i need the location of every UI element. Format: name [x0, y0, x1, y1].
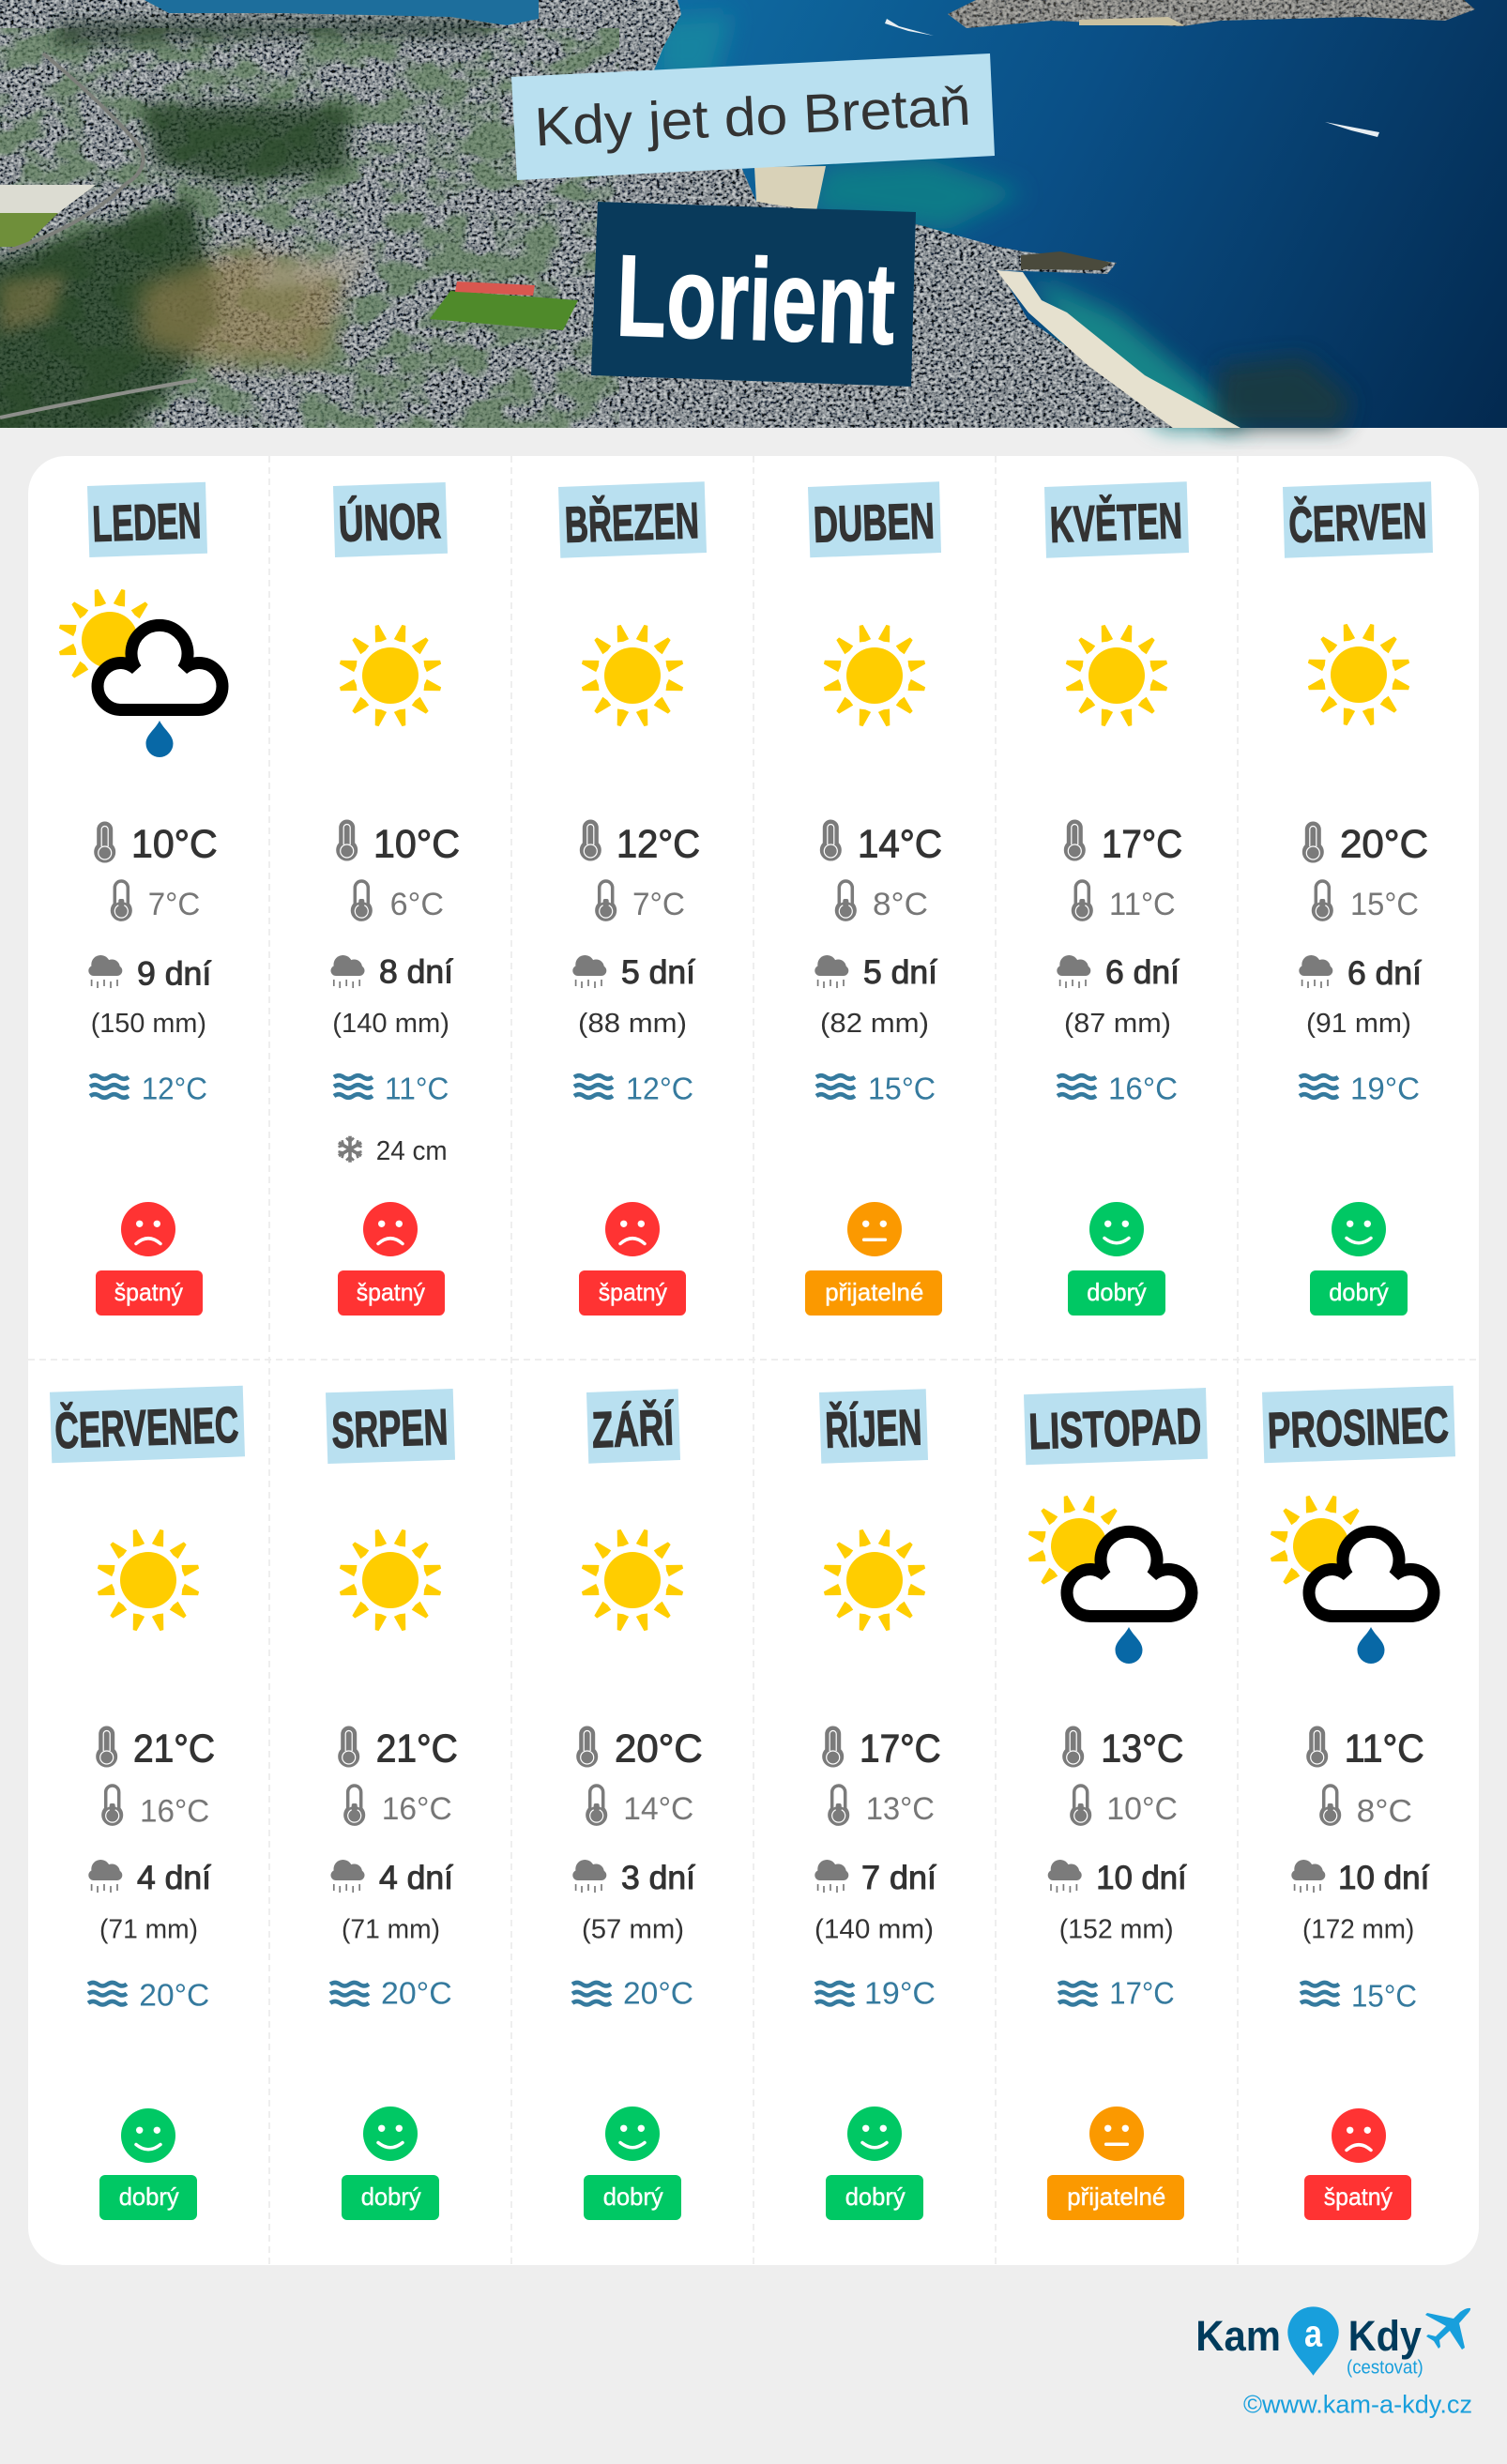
precipitation: (88 mm): [578, 1009, 687, 1039]
rainy days: [814, 1860, 936, 1896]
icon: sun: [339, 624, 442, 727]
icon: map pin: [1287, 2306, 1339, 2376]
rainy days: 10 dní: [1096, 1860, 1187, 1896]
icon: sun with cloud and rain: [58, 588, 222, 757]
rating badge: špatný: [1324, 2183, 1393, 2211]
heading: KVĚTEN: KVĚTEN: [1049, 492, 1183, 554]
heading: KVĚTEN: [1044, 481, 1189, 558]
rating face: [363, 2107, 418, 2161]
rainy days: 7 dní: [861, 1860, 936, 1896]
rating badge: dobrý: [603, 2183, 663, 2211]
min temperature: [112, 881, 200, 922]
max temperature: 20°C: [1340, 822, 1428, 865]
rating face: [363, 1202, 418, 1256]
photo: aerial view of Lorient coast: [0, 0, 1507, 450]
rating badge: [338, 1270, 445, 1316]
precipitation: (71 mm): [99, 1914, 198, 1944]
precipitation: (87 mm): [1064, 1009, 1171, 1039]
sea temperature: [574, 1072, 693, 1106]
sea temperature: 19°C: [1350, 1072, 1420, 1106]
rainy days: 5 dní: [621, 954, 695, 991]
rating badge: přijatelné: [825, 1278, 923, 1306]
rainy days: [1291, 1860, 1430, 1896]
max temperature: 10°C: [131, 822, 218, 865]
min temperature: [587, 1786, 693, 1827]
heading: ŘÍJEN: ŘÍJEN: [824, 1398, 922, 1459]
sea temperature: [572, 1976, 693, 2011]
month: Srpen: [326, 1389, 458, 2220]
max temperature: 13°C: [1101, 1726, 1183, 1771]
rating face: [605, 2107, 660, 2161]
website credit: ©www.kam-a-kdy.cz: [1243, 2391, 1472, 2419]
min temperature: [836, 881, 928, 922]
rating badge: dobrý: [1087, 1278, 1147, 1306]
rainy days: [572, 954, 695, 991]
sea temperature: 16°C: [1108, 1072, 1178, 1106]
precipitation: (140 mm): [332, 1009, 449, 1039]
max temperature: [1064, 820, 1182, 865]
icon: sun: [339, 1529, 442, 1632]
rainy days: 4 dní: [379, 1860, 453, 1896]
heading: ČERVEN: [1283, 481, 1433, 558]
sea temperature: 15°C: [868, 1072, 936, 1106]
icon: sun with cloud and rain: [1270, 1495, 1434, 1664]
rating badge: [1304, 2175, 1411, 2220]
rainy days: [814, 954, 937, 991]
min temperature: 7°C: [148, 887, 200, 922]
logo: Kam a Kdy: [1195, 2306, 1470, 2378]
max temperature: [95, 822, 218, 865]
month: Duben: [805, 481, 942, 1316]
min temperature: 11°C: [1109, 887, 1176, 922]
min temperature: 7°C: [632, 887, 685, 922]
logo: Kam a Kdy: Kam: [1195, 2312, 1281, 2360]
max temperature: 12°C: [616, 822, 700, 865]
heading: ÚNOR: [333, 482, 448, 557]
sea temperature: [815, 1976, 936, 2011]
rating face: [121, 2108, 175, 2163]
rating badge: [96, 1270, 203, 1316]
max temperature: 10°C: [373, 822, 460, 865]
snow depth: [338, 1136, 448, 1166]
precipitation: (71 mm): [342, 1914, 440, 1944]
rating face: [847, 1202, 902, 1256]
rating badge: dobrý: [361, 2183, 421, 2211]
precipitation: (57 mm): [582, 1914, 684, 1944]
max temperature: [339, 1726, 458, 1771]
month: Říjen: [814, 1389, 941, 2220]
rating badge: [1310, 1270, 1408, 1316]
max temperature: [823, 1726, 941, 1771]
rainy days: 5 dní: [863, 954, 937, 991]
max temperature: [820, 820, 942, 865]
heading: DUBEN: DUBEN: [813, 493, 936, 554]
rating badge: [826, 2175, 923, 2220]
sea temperature: [90, 1072, 207, 1106]
icon: sun: [581, 1529, 684, 1632]
min temperature: 14°C: [623, 1791, 693, 1827]
max temperature: [580, 820, 700, 865]
precipitation: (172 mm): [1302, 1914, 1414, 1944]
heading: BŘEZEN: [558, 481, 707, 558]
rating face: [605, 1202, 660, 1256]
sea temperature: 20°C: [139, 1978, 209, 2013]
rainy days: 10 dní: [1338, 1860, 1430, 1896]
rating badge: dobrý: [119, 2183, 179, 2211]
rainy days: 6 dní: [1105, 954, 1180, 991]
sea temperature: 12°C: [626, 1072, 693, 1106]
rainy days: [330, 1860, 453, 1896]
sea temperature: [1301, 1978, 1417, 2013]
rating face: [847, 2107, 902, 2161]
rainy days: 8 dní: [379, 954, 453, 991]
min temperature: [103, 1786, 209, 1830]
month: Prosinec: [1262, 1386, 1455, 2220]
rating badge: přijatelné: [1067, 2183, 1165, 2211]
heading: ČERVENEC: ČERVENEC: [53, 1396, 239, 1459]
heading: ZÁŘÍ: ZÁŘÍ: [591, 1398, 676, 1459]
rating face: [121, 1202, 175, 1256]
month: Květen: [1044, 481, 1189, 1316]
rainy days: 3 dní: [621, 1860, 695, 1896]
min temperature: [1073, 881, 1176, 922]
icon: sun: [1065, 624, 1168, 727]
max temperature: 14°C: [858, 822, 942, 865]
logo: Kam a Kdy: a: [1304, 2314, 1323, 2355]
max temperature: 11°C: [1345, 1726, 1424, 1771]
precipitation: (91 mm): [1306, 1009, 1411, 1039]
heading: BŘEZEN: BŘEZEN: [564, 492, 700, 554]
icon: airplane: [1425, 2308, 1470, 2350]
sea temperature: 12°C: [142, 1072, 207, 1106]
rainy days: [1299, 955, 1422, 992]
rating face: [1089, 1202, 1144, 1256]
min temperature: [597, 881, 685, 922]
month: Červenec: [50, 1386, 245, 2220]
rainy days: 6 dní: [1347, 955, 1422, 992]
max temperature: [1307, 1726, 1424, 1771]
rainy days: [572, 1860, 695, 1896]
sea temperature: [330, 1976, 452, 2011]
rating badge: [584, 2175, 681, 2220]
rainy days: [330, 954, 453, 991]
rainy days: 4 dní: [137, 1860, 211, 1896]
max temperature: 21°C: [376, 1726, 458, 1771]
title label: Kdy jet do Bretaň: Kdy jet do Bretaň: [533, 76, 972, 158]
rainy days: [1048, 1860, 1187, 1896]
rating badge: [99, 2175, 197, 2220]
rating badge: špatný: [114, 1278, 183, 1306]
heading: ČERVENEC: [50, 1386, 245, 1463]
heading: PROSINEC: [1262, 1386, 1455, 1463]
min temperature: 8°C: [1357, 1794, 1412, 1830]
heading: ÚNOR: ÚNOR: [338, 493, 442, 553]
sea temperature: [1058, 1976, 1175, 2011]
title label: Kdy jet do Bretaň: [511, 53, 995, 180]
max temperature: [337, 820, 460, 865]
rating face: [1089, 2107, 1144, 2161]
min temperature: [1313, 881, 1419, 922]
month: Únor: [330, 482, 460, 1316]
min temperature: [830, 1786, 935, 1827]
heading: LEDEN: LEDEN: [91, 493, 202, 553]
precipitation: (82 mm): [820, 1009, 929, 1039]
min temperature: 13°C: [866, 1791, 935, 1827]
month: Listopad: [1024, 1388, 1208, 2220]
sea temperature: 20°C: [623, 1976, 693, 2011]
heading: ZÁŘÍ: [586, 1389, 680, 1464]
icon: sun: [823, 624, 926, 727]
rating badge: [579, 1270, 686, 1316]
max temperature: 17°C: [1102, 822, 1182, 865]
min temperature: [1321, 1786, 1412, 1830]
rating badge: [1068, 1270, 1165, 1316]
rainy days: [88, 955, 212, 992]
month: Leden: [58, 482, 222, 1316]
max temperature: [97, 1726, 215, 1771]
heading: LISTOPAD: LISTOPAD: [1028, 1398, 1202, 1460]
rainy days: [1057, 954, 1180, 991]
logo: Kam a Kdy: (cestovat): [1347, 2357, 1423, 2378]
max temperature: 21°C: [133, 1726, 215, 1771]
min temperature: 15°C: [1350, 887, 1419, 922]
rating face: [1332, 1202, 1386, 1256]
sea temperature: [334, 1072, 449, 1106]
title label: Lorient: Lorient: [615, 231, 897, 370]
heading: LEDEN: [87, 482, 207, 557]
rainy days: 9 dní: [137, 955, 212, 992]
max temperature: 20°C: [615, 1726, 703, 1771]
min temperature: 10°C: [1106, 1791, 1178, 1827]
rainy days: [88, 1860, 211, 1896]
title label: Lorient: [591, 202, 916, 387]
icon: sun: [1307, 623, 1410, 726]
icon: sun: [823, 1529, 926, 1632]
heading: DUBEN: [808, 481, 941, 557]
max temperature: [577, 1726, 703, 1771]
min temperature: [345, 1786, 452, 1827]
min temperature: [352, 881, 444, 922]
rating badge: špatný: [357, 1278, 425, 1306]
rating face: [1332, 2108, 1386, 2163]
precipitation: (140 mm): [814, 1914, 934, 1944]
logo: Kam a Kdy: Kdy: [1348, 2312, 1422, 2360]
rating badge: [805, 1270, 942, 1316]
month: Září: [572, 1389, 703, 2220]
icon: sun: [97, 1529, 200, 1632]
max temperature: [1063, 1726, 1183, 1771]
rating badge: [1047, 2175, 1184, 2220]
panel: monthly climate table: [28, 456, 1479, 2265]
sea temperature: 17°C: [1109, 1976, 1175, 2011]
month: Červen: [1283, 481, 1433, 1316]
max temperature: 17°C: [860, 1726, 941, 1771]
icon: sun: [581, 624, 684, 727]
rating badge: špatný: [599, 1278, 667, 1306]
min temperature: 6°C: [390, 887, 444, 922]
snow depth: 24 cm: [376, 1136, 448, 1166]
sea temperature: [1300, 1072, 1420, 1106]
sea temperature: [816, 1072, 936, 1106]
sea temperature: 11°C: [385, 1072, 449, 1106]
rating badge: [342, 2175, 439, 2220]
heading: ŘÍJEN: [819, 1389, 928, 1464]
sea temperature: 20°C: [381, 1976, 452, 2011]
icon: sun with cloud and rain: [1028, 1495, 1192, 1664]
heading: SRPEN: SRPEN: [330, 1399, 449, 1459]
min temperature: [1072, 1786, 1178, 1827]
heading: LISTOPAD: [1024, 1388, 1208, 1465]
heading: ČERVEN: ČERVEN: [1287, 492, 1427, 554]
sea temperature: 15°C: [1351, 1978, 1417, 2013]
min temperature: 8°C: [873, 887, 928, 922]
precipitation: (152 mm): [1059, 1914, 1174, 1944]
sea temperature: [1058, 1072, 1178, 1106]
rating badge: dobrý: [1329, 1278, 1389, 1306]
min temperature: 16°C: [382, 1791, 452, 1827]
min temperature: 16°C: [140, 1794, 209, 1830]
sea temperature: 19°C: [864, 1976, 936, 2011]
month: Březen: [558, 481, 707, 1316]
rating badge: dobrý: [845, 2183, 906, 2211]
heading: SRPEN: [326, 1389, 455, 1464]
precipitation: (150 mm): [91, 1009, 206, 1039]
sea temperature: [88, 1978, 209, 2013]
